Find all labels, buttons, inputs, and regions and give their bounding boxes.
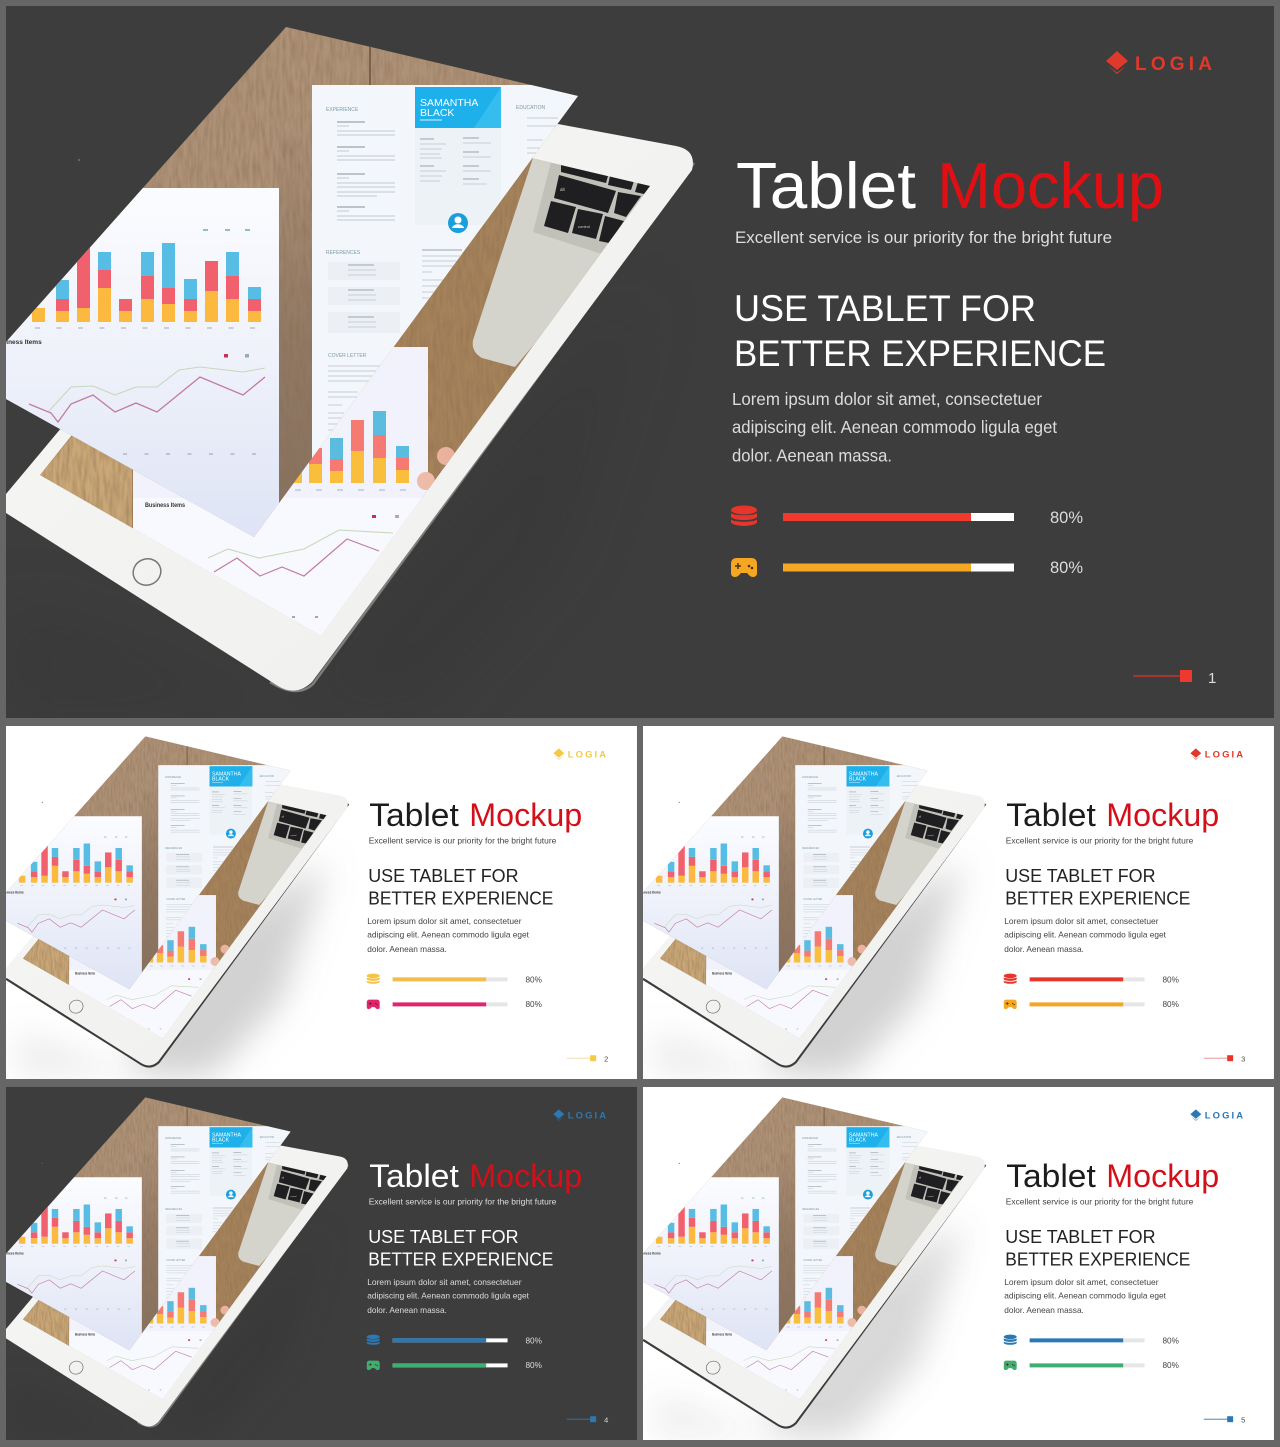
body text: dolor. Aenean massa.: [367, 944, 447, 954]
tablet edge: [643, 804, 985, 1066]
heading: USE TABLET FOR: [1005, 865, 1156, 886]
value: 80%: [525, 1000, 542, 1009]
tablet mockup: [0, 1094, 351, 1431]
panel: slide 3 white red-orange: [635, 726, 1274, 1079]
body text: Lorem ipsum dolor sit amet, consectetuer: [367, 1277, 522, 1287]
title: Mockup: [1106, 797, 1219, 833]
body text: adipiscing elit. Aenean commodo ligula eget: [1004, 930, 1167, 940]
icon: gamepad: [367, 1000, 380, 1009]
heading: BETTER EXPERIENCE: [1005, 1249, 1190, 1269]
value: 80%: [1050, 509, 1083, 527]
body text: Lorem ipsum dolor sit amet, consectetuer: [1004, 916, 1159, 926]
bar: [783, 513, 1014, 521]
value: 80%: [1050, 559, 1083, 577]
tablet edge: [643, 1165, 985, 1427]
pagination: 4: [604, 1416, 608, 1425]
tablet shadow: [6, 1223, 326, 1437]
heading: BETTER EXPERIENCE: [734, 333, 1106, 374]
icon: database: [367, 1335, 380, 1345]
bar: [393, 1002, 508, 1006]
tablet shadow: [6, 280, 650, 712]
title: Tablet: [1006, 1158, 1096, 1194]
body text: adipiscing elit. Aenean commodo ligula eget: [1004, 1291, 1167, 1301]
heading: BETTER EXPERIENCE: [368, 1249, 553, 1269]
logo: LOGIA: [1205, 749, 1243, 760]
title: Tablet: [369, 797, 459, 833]
pagination: [566, 1055, 608, 1062]
logo: [553, 1109, 606, 1121]
subtitle: Excellent service is our priority for the bright future: [369, 1197, 557, 1207]
tablet mockup: [0, 733, 351, 1070]
value: 80%: [525, 975, 542, 984]
tablet edge: [6, 804, 348, 1066]
bar: [393, 1363, 508, 1367]
pagination: [567, 1416, 608, 1425]
bar: [393, 977, 508, 981]
slide background: [6, 1087, 637, 1440]
icon: gamepad: [1004, 1000, 1017, 1009]
bar: [1030, 1002, 1145, 1006]
panel: slide 4 dark blue-green: [0, 1087, 637, 1440]
tablet mockup: [635, 733, 988, 1070]
body text: dolor. Aenean massa.: [732, 446, 892, 466]
body text: dolor. Aenean massa.: [1004, 944, 1084, 954]
tablet mockup: [0, 20, 700, 700]
heading: BETTER EXPERIENCE: [368, 888, 553, 908]
subtitle: Excellent service is our priority for the bright future: [735, 228, 1112, 247]
stat: database 80%: [367, 974, 542, 984]
bar: [1030, 977, 1145, 981]
stat: database 80%: [731, 506, 1083, 527]
stat: gamepad 80%: [731, 558, 1083, 577]
logo: [553, 748, 606, 760]
logo: LOGIA: [1205, 1110, 1243, 1121]
pagination: [1133, 670, 1216, 683]
subtitle: Excellent service is our priority for the bright future: [1006, 836, 1194, 846]
tablet shadow: [655, 862, 963, 1076]
bar: [1030, 1363, 1145, 1367]
slide background: [6, 6, 1274, 718]
pagination: 5: [1241, 1416, 1245, 1425]
tablet edge: [270, 163, 694, 691]
subtitle: Excellent service is our priority for the bright future: [1006, 1197, 1194, 1207]
body text: adipiscing elit. Aenean commodo ligula eget: [367, 1291, 530, 1301]
slide background: [6, 726, 637, 1079]
title: Mockup: [469, 1158, 582, 1194]
panel: slide 2 white yellow-pink: [0, 726, 637, 1079]
title: Tablet: [1006, 797, 1096, 833]
value: 80%: [1162, 1000, 1179, 1009]
title: Mockup: [469, 797, 582, 833]
stat: gamepad 80%: [367, 1000, 542, 1009]
body text: Lorem ipsum dolor sit amet, consectetuer: [1004, 1277, 1159, 1287]
stat: database 80%: [1004, 974, 1179, 984]
pagination: 1: [1208, 670, 1216, 687]
bar: [393, 1338, 508, 1342]
slide background: [643, 1087, 1274, 1440]
bar: [1030, 1338, 1145, 1342]
pagination: 3: [1241, 1055, 1245, 1064]
value: 80%: [1162, 975, 1179, 984]
body text: Lorem ipsum dolor sit amet, consectetuer: [732, 389, 1042, 409]
tablet edge: [137, 1165, 348, 1427]
subtitle: Excellent service is our priority for the bright future: [369, 836, 557, 846]
heading: USE TABLET FOR: [368, 1226, 519, 1247]
title: Tablet: [369, 1158, 459, 1194]
bar: [783, 564, 1014, 572]
stat: gamepad 80%: [367, 1361, 542, 1370]
pagination: 2: [604, 1055, 608, 1064]
logo: [1190, 748, 1243, 760]
value: 80%: [525, 1361, 542, 1370]
icon: database: [1004, 1335, 1017, 1345]
title: Tablet: [736, 149, 916, 222]
stat: gamepad 80%: [1004, 1000, 1179, 1009]
tablet mockup: [635, 1094, 988, 1431]
value: 80%: [525, 1336, 542, 1345]
body text: adipiscing elit. Aenean commodo ligula eget: [732, 417, 1057, 437]
panel: slide 5 white blue-green: [635, 1087, 1274, 1440]
icon: gamepad: [1004, 1361, 1017, 1370]
body text: Lorem ipsum dolor sit amet, consectetuer: [367, 916, 522, 926]
heading: USE TABLET FOR: [1005, 1226, 1156, 1247]
icon: gamepad: [367, 1361, 380, 1370]
stat: database 80%: [1004, 1335, 1179, 1345]
logo: LOGIA: [1135, 54, 1212, 75]
pagination: [1204, 1055, 1245, 1064]
heading: BETTER EXPERIENCE: [1005, 888, 1190, 908]
body text: adipiscing elit. Aenean commodo ligula eget: [367, 930, 530, 940]
icon: database: [1004, 974, 1017, 984]
icon: database: [367, 974, 380, 984]
icon: database: [731, 506, 757, 526]
pagination: [1204, 1416, 1245, 1425]
logo: LOGIA: [568, 749, 606, 760]
title: Mockup: [1106, 1158, 1219, 1194]
heading: USE TABLET FOR: [368, 865, 519, 886]
slide background: [643, 726, 1274, 1079]
tablet shadow: [655, 1223, 963, 1437]
panel: slide 1 dark large: [0, 6, 1274, 718]
heading: USE TABLET FOR: [734, 288, 1036, 329]
logo: LOGIA: [568, 1110, 606, 1121]
logo: [1190, 1109, 1243, 1121]
body text: dolor. Aenean massa.: [367, 1305, 447, 1315]
logo: [1106, 51, 1212, 75]
value: 80%: [1162, 1361, 1179, 1370]
stat: gamepad 80%: [1004, 1361, 1179, 1370]
stat: database 80%: [367, 1335, 542, 1345]
body text: dolor. Aenean massa.: [1004, 1305, 1084, 1315]
title: Mockup: [937, 149, 1164, 222]
icon: gamepad: [731, 558, 757, 577]
tablet shadow: [18, 862, 326, 1076]
value: 80%: [1162, 1336, 1179, 1345]
